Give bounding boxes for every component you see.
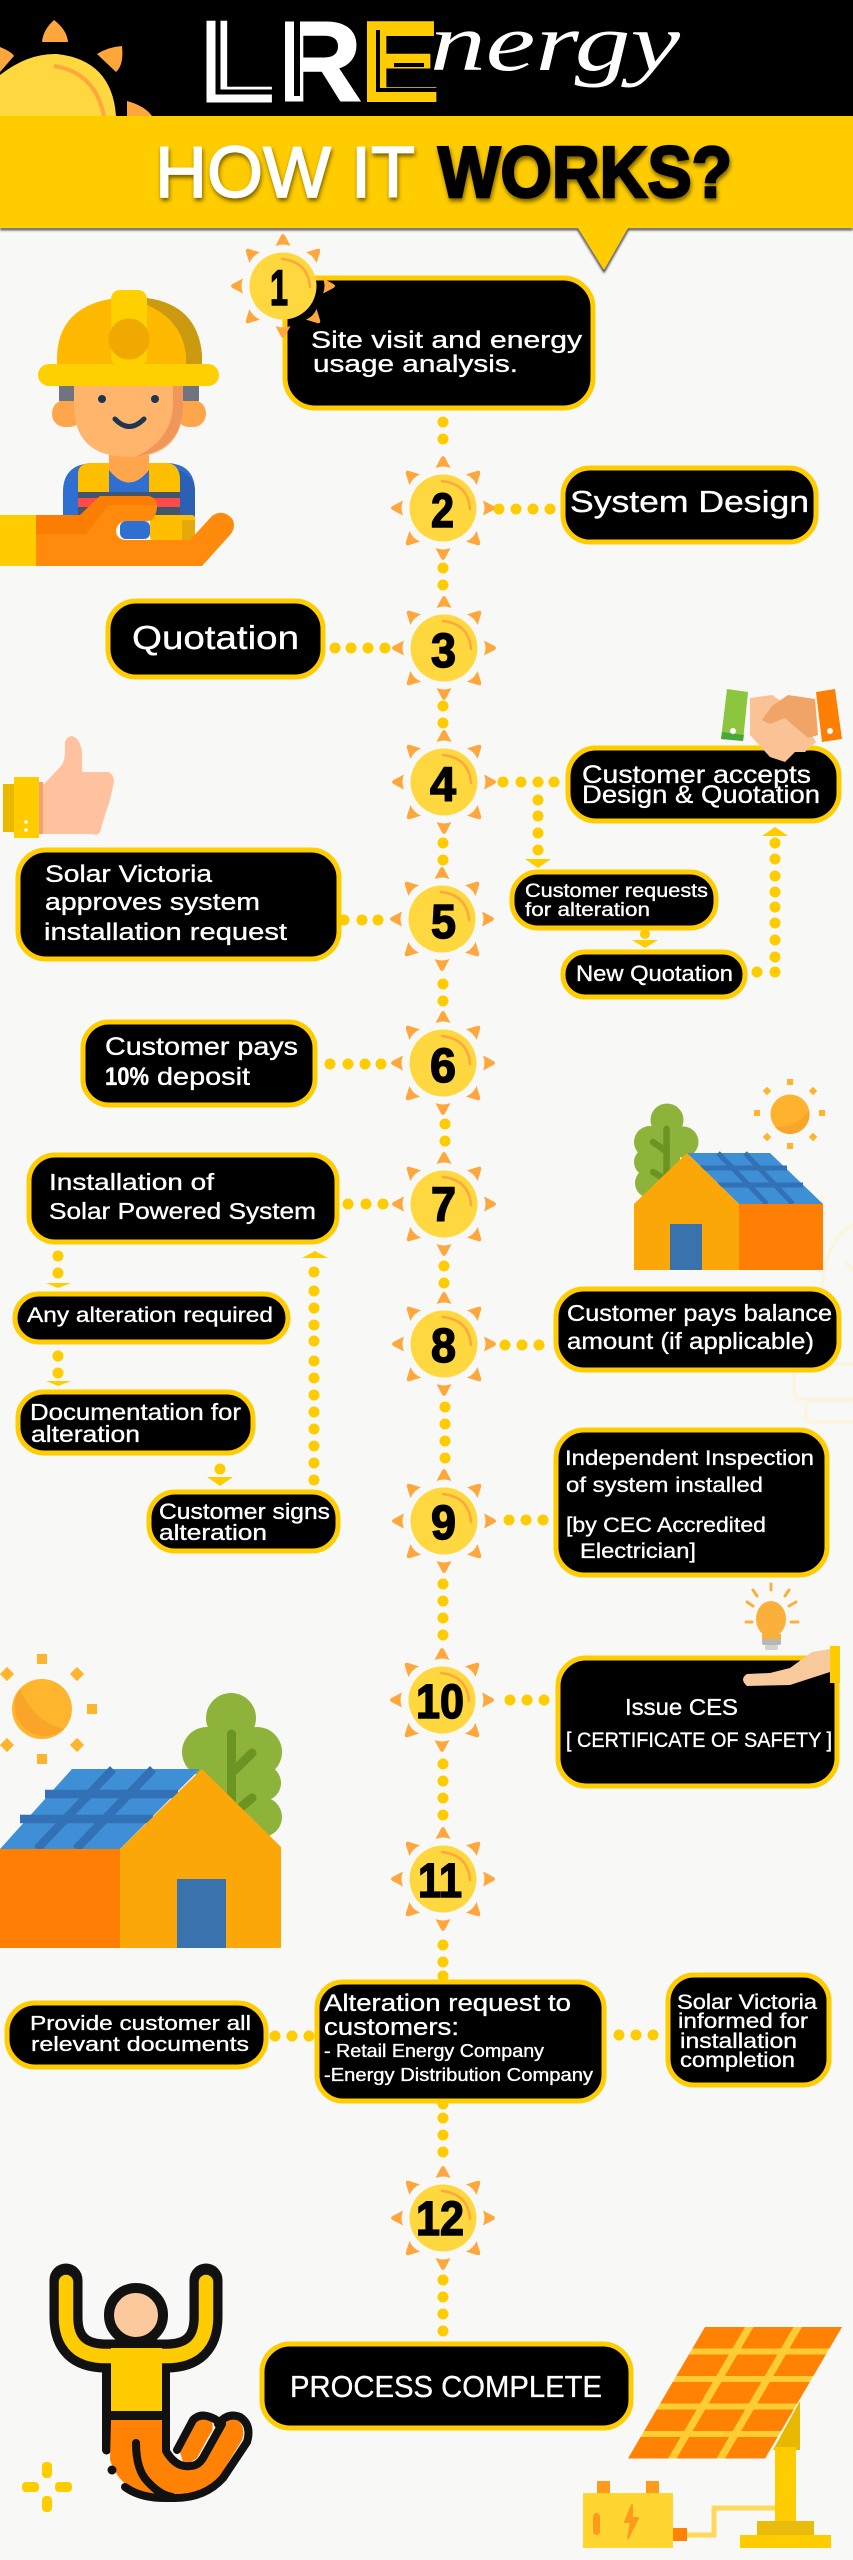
box: solar victoria informed	[668, 1975, 829, 2085]
step 2: 2	[431, 485, 454, 538]
box: customer requests for alteration: Customer requests	[525, 880, 708, 902]
box: installation	[29, 1155, 337, 1242]
box: documentation	[18, 1392, 253, 1453]
arrow: any alteration to documentation	[46, 1350, 71, 1386]
step 12: 12	[416, 2193, 464, 2246]
box: balance payment	[556, 1289, 839, 1370]
box: new quotation: New Quotation	[576, 961, 733, 986]
sun	[0, 1654, 97, 1764]
step 12	[391, 2166, 495, 2270]
arrow: customer signs up to installation	[302, 1251, 328, 1486]
box: new quotation	[563, 952, 745, 997]
tree	[182, 1693, 282, 1837]
illustration: jumping person	[66, 2280, 248, 2498]
box: customer signs: Customer signs	[159, 1499, 330, 1524]
step 1	[231, 234, 335, 338]
box: solar victoria informed: completion	[680, 2049, 795, 2072]
step 5: 5	[431, 896, 456, 949]
step 4: 4	[430, 759, 456, 812]
box: quotation	[108, 601, 323, 677]
icon: sparkle	[22, 2462, 72, 2512]
battery	[583, 2481, 687, 2548]
box: any alteration required: Any alteration required	[27, 1304, 273, 1327]
logo: LR Energy: L	[200, 0, 274, 126]
box: process complete: PROCESS COMPLETE	[290, 2369, 602, 2404]
box: site visit: usage analysis.	[313, 351, 518, 378]
illustration: worker	[0, 290, 234, 566]
box: quotation: Quotation	[132, 619, 299, 656]
box: balance payment: amount (if applicable)	[567, 1328, 814, 1354]
box: alteration request: - Retail Energy Company	[324, 2041, 544, 2061]
box: solar victoria informed: installation	[680, 2030, 797, 2053]
box: customer requests for alteration: for alteration	[525, 899, 650, 921]
box: customer accepts	[568, 748, 839, 821]
box: customer pays deposit: deposit	[157, 1063, 250, 1091]
arrow: installation down to any alteration	[46, 1250, 71, 1288]
box: alteration request: -Energy Distribution Company	[324, 2065, 593, 2085]
box: customer accepts: Customer accepts	[582, 761, 811, 789]
title banner	[0, 116, 853, 271]
step 8: 8	[431, 1320, 456, 1373]
box: provide documents: Provide customer all	[30, 2012, 251, 2035]
step 11	[391, 1827, 495, 1931]
icon: hand with light bulb	[743, 1584, 840, 1686]
step 7: 7	[431, 1179, 456, 1232]
box: customer accepts: Design & Quotation	[582, 781, 820, 809]
illustration: small house with solar roof	[634, 1079, 825, 1270]
box: system design	[563, 468, 816, 542]
box: solar victoria approves: Solar Victoria	[45, 861, 213, 888]
step 8	[392, 1292, 496, 1396]
box: provide documents: relevant documents	[31, 2033, 249, 2056]
sun	[754, 1079, 825, 1149]
step 5	[390, 867, 494, 971]
icon: thumbs up	[3, 736, 114, 838]
box: customer pays deposit: 10%	[105, 1063, 149, 1091]
tree	[634, 1104, 698, 1198]
arrow: customer requests to new quotation	[632, 929, 658, 948]
box: independent inspection: Independent Inspection	[565, 1446, 814, 1470]
box: solar victoria approves	[18, 850, 339, 959]
connector dots: horizontal links	[270, 504, 658, 2042]
box: alteration request	[317, 1982, 604, 2101]
box: site visit: Site visit and energy	[311, 327, 582, 354]
icon: corner sun	[0, 20, 152, 116]
arrow: step 4 down to customer requests	[525, 794, 551, 868]
arrow: documentation to customer signs	[207, 1464, 233, 1486]
logo: LR Energy: R	[278, 0, 362, 126]
icon: handshake	[721, 689, 842, 762]
step 6: 6	[430, 1040, 456, 1093]
step 9	[392, 1469, 496, 1573]
box: provide documents	[7, 2003, 266, 2067]
step 6	[391, 1011, 495, 1115]
box: solar victoria informed: Solar Victoria	[677, 1991, 817, 2014]
box: alteration request: customers:	[324, 2014, 459, 2041]
box: documentation: Documentation for	[30, 1399, 241, 1425]
step 9: 9	[431, 1497, 456, 1550]
box: issue CES: Issue CES	[625, 1694, 738, 1720]
box: independent inspection: [by CEC Accredited	[566, 1513, 766, 1537]
box: customer pays deposit: Customer pays	[105, 1033, 298, 1061]
heading: How it works: HOW IT	[155, 133, 415, 213]
step 4	[392, 730, 496, 834]
arrow: new quotation up to customer accepts	[752, 827, 788, 978]
step 10	[390, 1648, 494, 1752]
box: any alteration required	[15, 1294, 288, 1342]
connector dots: vertical spine	[438, 416, 450, 2336]
logo: LR Energy	[200, 0, 681, 126]
box: solar victoria informed: informed for	[678, 2010, 808, 2033]
box: independent inspection: Electrician]	[580, 1539, 696, 1563]
box: installation: Solar Powered System	[49, 1198, 316, 1224]
box: customer signs	[149, 1492, 338, 1551]
box: independent inspection	[556, 1430, 827, 1575]
step 10: 10	[416, 1676, 464, 1729]
box: installation: Installation of	[49, 1169, 215, 1195]
box: customer signs: alteration	[159, 1520, 267, 1545]
box: issue CES: [ CERTIFICATE OF SAFETY ]	[566, 1729, 832, 1752]
box: customer pays deposit	[83, 1022, 315, 1105]
illustration: large house with solar roof	[0, 1654, 282, 1948]
box: site visit	[285, 278, 593, 408]
step 2	[391, 456, 495, 560]
step 11: 11	[418, 1855, 462, 1908]
box: solar victoria approves: approves system	[45, 889, 260, 916]
illustration: solar panel and battery	[583, 2327, 842, 2548]
box: alteration request: Alteration request to	[324, 1990, 571, 2017]
step 3: 3	[431, 625, 456, 678]
box: system design: System Design	[570, 484, 809, 519]
logo: LR Energy: E	[360, 0, 440, 126]
heading: How it works: WORKS?	[438, 133, 732, 213]
header: black bar with logo	[0, 0, 853, 126]
step 7	[392, 1152, 496, 1256]
step 1: 1	[270, 260, 288, 316]
box: customer requests for alteration	[512, 872, 716, 928]
step 3	[392, 596, 496, 700]
box: process complete	[262, 2344, 631, 2428]
box: solar victoria approves: installation request	[44, 919, 287, 946]
box: issue CES	[558, 1658, 837, 1786]
box: balance payment: Customer pays balance	[567, 1300, 832, 1326]
faint background light bulb	[794, 1195, 853, 1422]
box: documentation: alteration	[31, 1421, 140, 1447]
box: independent inspection: of system installed	[566, 1473, 763, 1497]
heading: How it works	[155, 133, 732, 213]
